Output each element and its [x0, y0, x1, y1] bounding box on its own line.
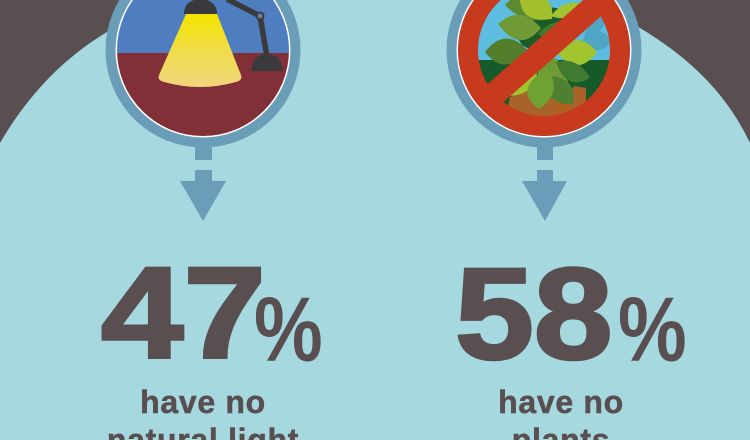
panel: natural light statistic [101, 0, 323, 440]
stat: 58 percent: % [618, 279, 687, 382]
arrow: down from lamp icon [180, 146, 226, 221]
label: have no plants [498, 384, 624, 440]
icon: desk lamp in circle [110, 0, 300, 143]
label: have no natural light [107, 384, 299, 440]
label: have no plants: have no [498, 384, 624, 420]
stat: 58 percent [455, 241, 687, 386]
stat: 58 percent: 58 [455, 241, 613, 386]
panel: plants statistic [450, 0, 687, 440]
arrow: down from plant icon [522, 146, 567, 221]
stat: 47 percent: % [254, 279, 323, 382]
stat: 47 percent: 47 [101, 240, 266, 385]
label: have no natural light: have no [140, 384, 266, 420]
icon: plant with prohibition sign [450, 0, 640, 142]
